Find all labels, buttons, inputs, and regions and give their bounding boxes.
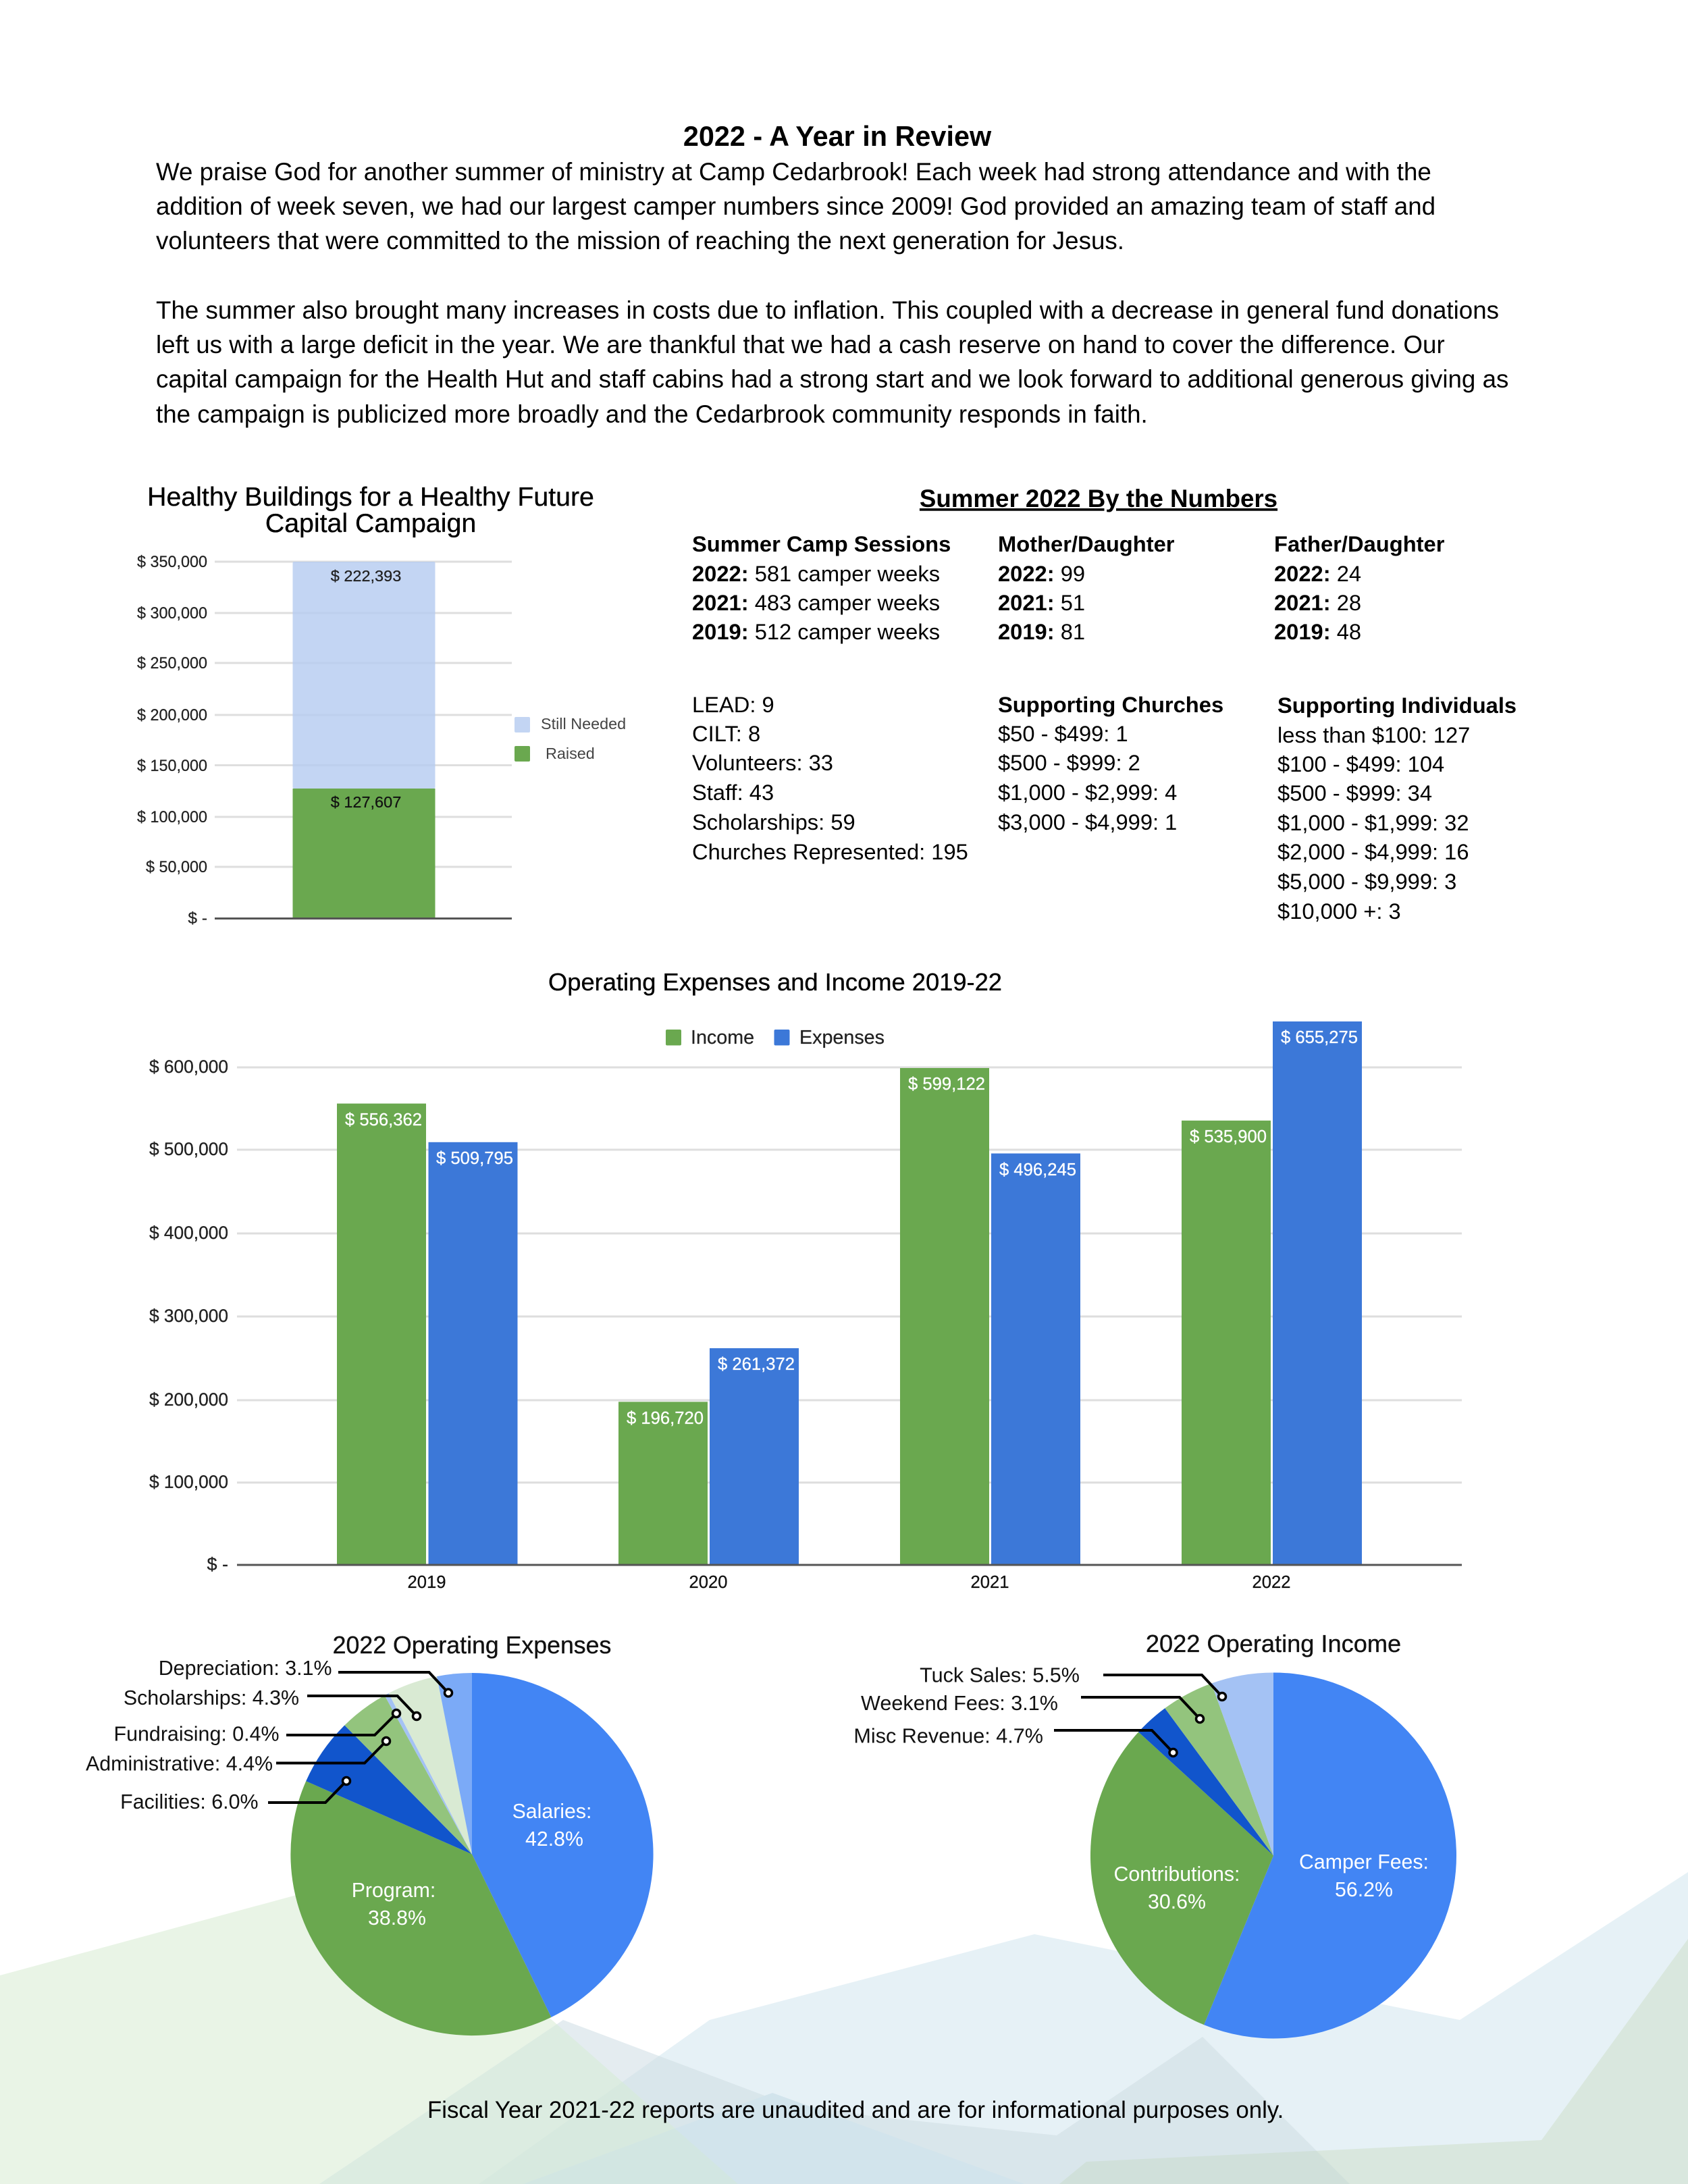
summer camp sessions: 2019: 512 camper weeks: [692, 619, 940, 644]
bars: 2021: [900, 1068, 1080, 1565]
bars: 2020: [618, 1348, 799, 1565]
panel: summer 2022 by the numbers: [692, 485, 1516, 924]
pie slices: [1090, 1672, 1456, 2039]
y axis labels: $ 100,000: [137, 808, 207, 826]
supporting individuals: $5,000 - $9,999: 3: [1277, 869, 1456, 894]
bar segment: raised: [293, 789, 435, 918]
intro text block: addition of week seven, we had our largest camper numbers since 2009! God provided an amazing team of staff and: [156, 192, 1435, 220]
participation counts: Volunteers: 33: [692, 750, 833, 775]
callout: scholarships: [124, 1686, 420, 1720]
slice labels: 30.6%: [1148, 1891, 1206, 1913]
y axis labels: $ 250,000: [137, 654, 207, 672]
y axis labels: $ 500,000: [149, 1139, 228, 1159]
slice labels: Contributions:: [1114, 1863, 1240, 1886]
intro text block: [156, 158, 1508, 428]
supporting individuals: $2,000 - $4,999: 16: [1277, 839, 1469, 864]
panel: 2022 operating expenses pie: [86, 1632, 654, 2035]
y axis labels: $ -: [207, 1554, 228, 1574]
participation counts: CILT: 8: [692, 721, 760, 746]
mother/daughter: 2022: 99: [998, 561, 1085, 586]
y axis labels: $ 100,000: [149, 1472, 228, 1492]
father/daughter: 2022: 24: [1274, 561, 1361, 586]
supporting individuals: $100 - $499: 104: [1277, 751, 1444, 776]
legend: Expenses: [799, 1027, 885, 1048]
supporting individuals: $10,000 +: 3: [1277, 899, 1401, 924]
callout: fundraising: [114, 1709, 400, 1746]
mother/daughter: 2019: 81: [998, 619, 1085, 644]
intro text block: The summer also brought many increases in costs due to inflation. This coupled with a decrease in general fund donations: [156, 296, 1499, 324]
summer camp sessions: Summer Camp Sessions: [692, 531, 951, 556]
heading: Summer 2022 By the Numbers: [920, 485, 1277, 512]
callout: tuck sales: Tuck Sales: 5.5%: [920, 1663, 1080, 1686]
bar value labels: $ 261,372: [718, 1354, 795, 1374]
bar value labels: [345, 1027, 1358, 1428]
bar value labels: $ 509,795: [436, 1148, 513, 1168]
callout: facilities: Facilities: 6.0%: [120, 1790, 258, 1813]
y axis labels: $ 600,000: [149, 1057, 228, 1077]
panel: capital campaign chart: [137, 482, 626, 928]
bar value labels: $ 556,362: [345, 1109, 422, 1129]
callout: administrative: Administrative: 4.4%: [86, 1753, 273, 1776]
pie title: 2022 Operating Expenses: [333, 1632, 611, 1659]
callout: tuck sales: [920, 1663, 1226, 1700]
intro text block: capital campaign for the Health Hut and staff cabins had a strong start and we look forward to additional generous giving as: [156, 365, 1508, 393]
intro text block: left us with a large deficit in the year. We are thankful that we had a cash reserve on hand to cover the difference. Our: [156, 331, 1445, 358]
chart title: Operating Expenses and Income 2019-22: [548, 968, 1002, 996]
slice labels: 56.2%: [1335, 1879, 1393, 1901]
intro text block: the campaign is publicized more broadly and the Cedarbrook community responds in faith.: [156, 400, 1148, 428]
callout: facilities: [120, 1777, 350, 1813]
footer note: Fiscal Year 2021-22 reports are unaudited and are for informational purposes only.: [427, 2097, 1284, 2123]
callout: misc revenue: Misc Revenue: 4.7%: [853, 1724, 1043, 1747]
supporting churches: Supporting Churches: [998, 692, 1223, 717]
panel: 2022 operating income pie: [853, 1630, 1456, 2039]
father/daughter: 2019: 48: [1274, 619, 1361, 644]
bar value labels: $ 496,245: [999, 1159, 1076, 1179]
bars: 2022: [1182, 1021, 1362, 1565]
supporting individuals: $500 - $999: 34: [1277, 780, 1432, 805]
callout: depreciation: Depreciation: 3.1%: [159, 1657, 332, 1680]
bar value labels: $ 535,900: [1190, 1126, 1267, 1146]
y axis labels: $ -: [188, 909, 207, 928]
slice labels: [1114, 1851, 1429, 1913]
mother/daughter: Mother/Daughter: [998, 531, 1175, 556]
slice labels: 38.8%: [368, 1907, 426, 1929]
bar value labels: $ 599,122: [908, 1073, 985, 1094]
father/daughter: Father/Daughter: [1274, 531, 1445, 556]
x axis labels: 2022: [1252, 1573, 1290, 1592]
callout: weekend fees: [861, 1692, 1203, 1723]
y axis labels: [149, 1057, 228, 1574]
bar labels: $ 127,607: [331, 793, 401, 811]
legend: Still Needed: [541, 715, 626, 733]
father/daughter: 2021: 28: [1274, 590, 1361, 615]
legend: [666, 1027, 885, 1048]
slice labels: 42.8%: [525, 1828, 583, 1850]
bar value labels: $ 196,720: [627, 1408, 704, 1428]
y axis labels: $ 150,000: [137, 757, 207, 775]
supporting individuals: [1277, 693, 1516, 924]
father/daughter: [1274, 531, 1445, 644]
summer camp sessions: 2022: 581 camper weeks: [692, 561, 940, 586]
pie slices: [290, 1673, 654, 2035]
chart title: capital campaign: Capital Campaign: [265, 508, 476, 538]
participation counts: LEAD: 9: [692, 692, 774, 717]
callout: depreciation: [159, 1657, 452, 1697]
supporting churches: $50 - $499: 1: [998, 721, 1128, 746]
legend: [515, 715, 626, 762]
title: 2022 - A Year in Review: [683, 121, 992, 152]
slice labels: Program:: [352, 1880, 436, 1902]
y axis labels: $ 300,000: [149, 1306, 228, 1326]
x axis labels: [408, 1573, 1290, 1592]
panel: operating expenses and income bar chart: [149, 968, 1462, 1592]
bar labels: $ 222,393: [331, 567, 401, 585]
chart title: capital campaign: Healthy Buildings for a Healthy Future: [147, 482, 594, 512]
background: layered mountain shapes: [0, 1872, 1688, 2184]
supporting churches: [998, 692, 1223, 834]
mother/daughter: [998, 531, 1175, 644]
participation counts: Churches Represented: 195: [692, 839, 968, 864]
y axis labels: $ 200,000: [149, 1389, 228, 1410]
bar labels: [331, 567, 401, 811]
supporting churches: $500 - $999: 2: [998, 750, 1140, 775]
y axis labels: $ 400,000: [149, 1223, 228, 1243]
y axis labels: $ 350,000: [137, 553, 207, 571]
participation counts: Scholarships: 59: [692, 809, 855, 834]
callout: fundraising: Fundraising: 0.4%: [114, 1723, 280, 1746]
supporting individuals: Supporting Individuals: [1277, 693, 1516, 718]
participation counts: Staff: 43: [692, 780, 774, 805]
y axis labels: $ 200,000: [137, 706, 207, 724]
summer camp sessions: 2021: 483 camper weeks: [692, 590, 940, 615]
callout: misc revenue: [853, 1724, 1177, 1757]
callout: weekend fees: Weekend Fees: 3.1%: [861, 1692, 1058, 1715]
intro text block: volunteers that were committed to the mission of reaching the next generation for Jesus.: [156, 227, 1124, 255]
slice labels: [352, 1801, 591, 1929]
x axis labels: 2020: [689, 1573, 727, 1592]
x axis labels: 2021: [971, 1573, 1009, 1592]
bar segment: still needed: [293, 562, 435, 789]
supporting churches: $3,000 - $4,999: 1: [998, 809, 1177, 834]
callout: administrative: [86, 1738, 390, 1776]
bars: 2019: [337, 1104, 517, 1565]
y axis labels: $ 300,000: [137, 604, 207, 622]
intro text block: We praise God for another summer of ministry at Camp Cedarbrook! Each week had strong attendance and with the: [156, 158, 1431, 186]
mother/daughter: 2021: 51: [998, 590, 1085, 615]
slice labels: Salaries:: [512, 1801, 591, 1823]
summer camp sessions: [692, 531, 951, 644]
slice labels: Camper Fees:: [1299, 1851, 1429, 1873]
chart title: capital campaign: [147, 482, 594, 538]
legend: Income: [691, 1027, 754, 1048]
supporting individuals: $1,000 - $1,999: 32: [1277, 810, 1469, 835]
callout: scholarships: Scholarships: 4.3%: [124, 1686, 299, 1709]
x axis labels: 2019: [408, 1573, 446, 1592]
participation counts: [692, 692, 968, 864]
y axis labels: [137, 553, 207, 928]
pie title: 2022 Operating Income: [1146, 1630, 1401, 1657]
bar value labels: $ 655,275: [1281, 1027, 1358, 1047]
legend: Raised: [546, 745, 595, 762]
supporting churches: $1,000 - $2,999: 4: [998, 780, 1177, 805]
supporting individuals: less than $100: 127: [1277, 722, 1470, 747]
y axis labels: $ 50,000: [146, 858, 207, 876]
